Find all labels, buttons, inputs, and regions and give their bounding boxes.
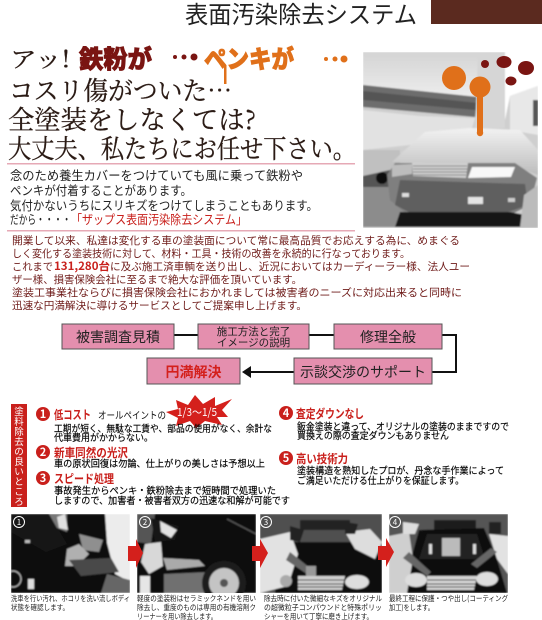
step photo 3: polishing: 3 [264, 517, 268, 528]
caption 1: 洗車を行い汚れ、ホコリを洗い流しボディ [11, 593, 130, 604]
benefit 4: no value loss: 4 [283, 405, 290, 421]
caption 3: の超微粒子コンパウンドと特殊ポリッ [264, 602, 382, 613]
company paragraph: 開業して以来、私達は変化する車の塗装面について常に最高品質でお応えする為に、めまぐる [12, 233, 460, 248]
step: damage survey: 被害調査見積 [76, 327, 160, 347]
headline: ペンキが [204, 40, 294, 76]
company paragraph: 迅速な円満解決に導けるサービスとしてご提案申し上げます。 [12, 298, 307, 313]
flow connectors [174, 335, 456, 372]
vertical red label: い [14, 464, 24, 478]
benefit 1: low cost: 低コスト [54, 406, 91, 423]
benefit 5: high skill: ご満足いただける仕上がりを保証します。 [297, 473, 464, 487]
company paragraph: に及ぶ施工済車輌を送り出し、近況においてはカーディーラー様、法人ユー [110, 259, 470, 274]
step: settlement support: 示談交渉のサポート [300, 362, 426, 382]
benefit 4: no value loss: 鈑金塗装と違って、オリジナルの塗装のままですので [297, 419, 509, 433]
step: resolution [147, 358, 240, 384]
step: damage survey [62, 324, 174, 349]
caption 4 [389, 593, 508, 613]
caption 4: 最終工程に保護・つや出し(コーティング [389, 593, 508, 604]
company paragraph: これまで [12, 259, 53, 274]
benefit 2: like-new shine [36, 444, 265, 470]
vertical red label: 塗 [14, 404, 24, 418]
benefit 5: high skill: 5 [283, 450, 289, 466]
step photo 4: coating: 4 [393, 517, 398, 528]
benefit 3: speed: 事故発生からペンキ・鉄粉除去まで短時間で処理いた [54, 483, 276, 497]
intro text [10, 165, 318, 228]
vertical red label [11, 404, 27, 508]
arrow: step 1 to 2 [128, 539, 143, 568]
benefit 4: no value loss [279, 405, 509, 442]
headline: 鉄粉が [79, 40, 152, 76]
step photo 2: paint removal [137, 514, 256, 605]
caption 2 [137, 593, 256, 620]
benefit 3: speed: しますので、加害者・被害者双方の迅速な和解が可能です [54, 493, 290, 507]
step: repair: 修理全般 [360, 327, 416, 347]
step: repair [334, 324, 442, 349]
caption 3 [264, 593, 382, 620]
caption 1: 状態を確認します。 [11, 602, 69, 613]
benefit 2: like-new shine: 新車同然の光沢 [54, 444, 128, 461]
step photo 1: washing: 1 [17, 517, 21, 528]
benefit 5: high skill [279, 450, 504, 487]
step: method explanation [198, 324, 309, 350]
benefit 1: low cost: オールペイントの [98, 407, 166, 422]
company paragraph [12, 233, 470, 313]
headline: アッ! [10, 41, 70, 74]
arrow to resolution [242, 366, 294, 378]
intro text: 「ザップス表面汚染除去システム」 [71, 209, 247, 228]
benefit 1: low cost: 1/3〜1/5 [177, 404, 217, 420]
vertical red label: の [14, 444, 24, 458]
intro text: 気付かないうちにスリキズをつけてしまうこともあります。 [10, 195, 318, 214]
benefit 3: speed: スピード処理 [54, 470, 114, 487]
step photo 1: washing [5, 514, 130, 593]
intro text: だから・・・・ [10, 209, 71, 228]
flow diagram [62, 324, 456, 384]
caption 2: 除去し、重度のものは専用の有機溶剤ク [137, 602, 256, 613]
step photo 4: coating [389, 514, 508, 593]
caption 4: 加工)をします。 [389, 602, 434, 613]
vertical red label: 料 [14, 414, 24, 428]
step photo 3: polishing [260, 514, 382, 593]
benefit 2: like-new shine: 車の原状回復は勿論、仕上がりの美しさは予想以上 [54, 456, 265, 470]
step: resolution: 円満解決 [166, 362, 222, 382]
benefit 3: speed: 3 [40, 470, 46, 486]
company paragraph: ザー様、損害保険会社に至るまで絶大な評価を頂いています。 [12, 272, 302, 287]
caption 3: 除去時に付いた微細なキズをオリジナル [264, 593, 382, 604]
intro text: ペンキが付着することがあります。 [10, 180, 192, 199]
vertical red label: 良 [14, 454, 24, 468]
benefit 1: low cost [36, 395, 272, 444]
step photo 2: paint removal: 2 [143, 517, 148, 528]
pink rule [7, 163, 355, 164]
benefit 3: speed [36, 470, 290, 507]
benefit 4: no value loss: 査定ダウンなし [296, 405, 364, 422]
pink rule [7, 230, 355, 232]
arrow: step 2 to 3 [252, 539, 268, 568]
benefit 1: low cost: 代車費用がかからない。 [54, 430, 153, 444]
benefit 1: low cost: 1 [40, 406, 46, 422]
vertical red label: と [14, 474, 24, 488]
photo: covered car with paint splatter [363, 52, 538, 228]
benefit 5: high skill: 高い技術力 [296, 450, 348, 467]
headline: コスリ傷がついた… [9, 71, 232, 108]
vertical red label: こ [14, 484, 24, 498]
vertical red label: 除 [14, 424, 24, 438]
brown header block [431, 0, 542, 24]
benefit 4: no value loss: 買換えの際の査定ダウンもありません [297, 428, 449, 442]
step: method explanation: イメージの説明 [217, 335, 290, 350]
caption 1 [11, 593, 130, 613]
company paragraph: 塗装工事業社ならびに損害保険会社におかれましては被害者のニーズに対応出来ると同時に [12, 285, 462, 300]
arrow: step 3 to 4 [378, 538, 394, 567]
company paragraph: 131,280台 [54, 258, 110, 274]
benefit 2: like-new shine: 2 [40, 444, 46, 460]
vertical red label: ろ [14, 494, 24, 508]
headline [8, 40, 356, 166]
headline: 大丈夫、私たちにお任せ下さい。 [8, 129, 356, 166]
benefit 5: high skill: 塗装構造を熟知したプロが、丹念な手作業によって [297, 463, 504, 477]
caption 2: 軽度の塗装粉はセラミックネンドを用い [137, 593, 256, 604]
company paragraph: しく変化する塗装技術に対して、材料・工具・技術の改善を永続的に行なっております。 [12, 246, 410, 261]
step: method explanation: 施工方法と完了 [217, 324, 290, 339]
benefit 1: low cost: 工期が短く、無駄な工賃や、部品の使用がなく、余計な [54, 421, 272, 435]
intro text: 念のため養生カバーをつけていても風に乗って鉄粉や [10, 165, 303, 184]
headline: 全塗装をしなくては? [8, 100, 256, 137]
vertical red label: 去 [14, 434, 24, 448]
